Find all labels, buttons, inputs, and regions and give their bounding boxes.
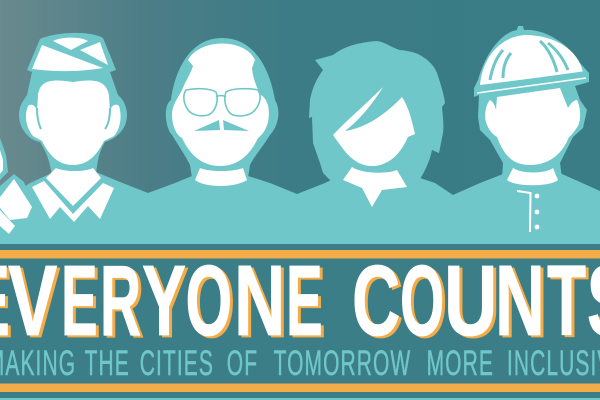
figure: person with side-swept hair (309, 41, 445, 207)
title banner (0, 240, 600, 400)
title: N (234, 245, 285, 357)
figure: bald man with glasses and moustache (166, 38, 278, 186)
title: N (495, 245, 545, 357)
glasses (184, 89, 260, 116)
head outline (166, 38, 278, 178)
title shadow: R (103, 247, 144, 359)
title shadow: U (447, 246, 500, 359)
title shadow: V (11, 246, 61, 359)
head outline (19, 33, 127, 176)
title shadow: N (498, 247, 548, 359)
title: O (186, 245, 232, 357)
face (26, 81, 121, 165)
face (333, 87, 415, 166)
face (485, 88, 580, 165)
title shadow: E (289, 248, 326, 359)
shoulders band (0, 172, 600, 240)
head outline (474, 26, 589, 178)
neck and collar (32, 168, 114, 222)
cap (32, 38, 108, 71)
title shadow (0, 246, 600, 359)
title: U (444, 244, 497, 357)
neck (507, 168, 558, 185)
bottom orange stripe (0, 384, 600, 392)
title: C (352, 246, 400, 357)
subtitle: THE (85, 345, 130, 383)
jacket placket and buttons (517, 191, 539, 232)
helmet (480, 35, 583, 85)
title: V (8, 244, 58, 357)
title shadow: Y (145, 246, 189, 358)
subtitle: OF (227, 345, 258, 383)
title: E (286, 246, 323, 357)
face (172, 44, 269, 166)
title: R (100, 245, 141, 357)
title: E (61, 246, 98, 357)
title shadow: N (237, 247, 288, 359)
neck (195, 168, 247, 186)
figure: worker with hard hat (474, 26, 589, 232)
subtitle: MORE (427, 345, 494, 383)
title shadow: T (550, 246, 589, 358)
figure: person with garrison cap (19, 33, 127, 222)
hair (309, 41, 445, 182)
title shadow: O (403, 247, 447, 359)
title shadow: E (64, 248, 101, 359)
figure: hand at left edge (0, 138, 34, 236)
title shadow: O (188, 247, 235, 359)
title: T (547, 244, 586, 356)
title: Y (142, 244, 186, 356)
title: O (400, 245, 444, 357)
subtitle: CITIES (140, 345, 214, 383)
brim line (477, 78, 586, 93)
subtitle: TOMORROW (274, 345, 411, 383)
top orange stripe (0, 250, 600, 258)
moustache (194, 120, 249, 131)
collar (343, 167, 407, 207)
title (0, 244, 600, 357)
title shadow: C (355, 248, 403, 359)
